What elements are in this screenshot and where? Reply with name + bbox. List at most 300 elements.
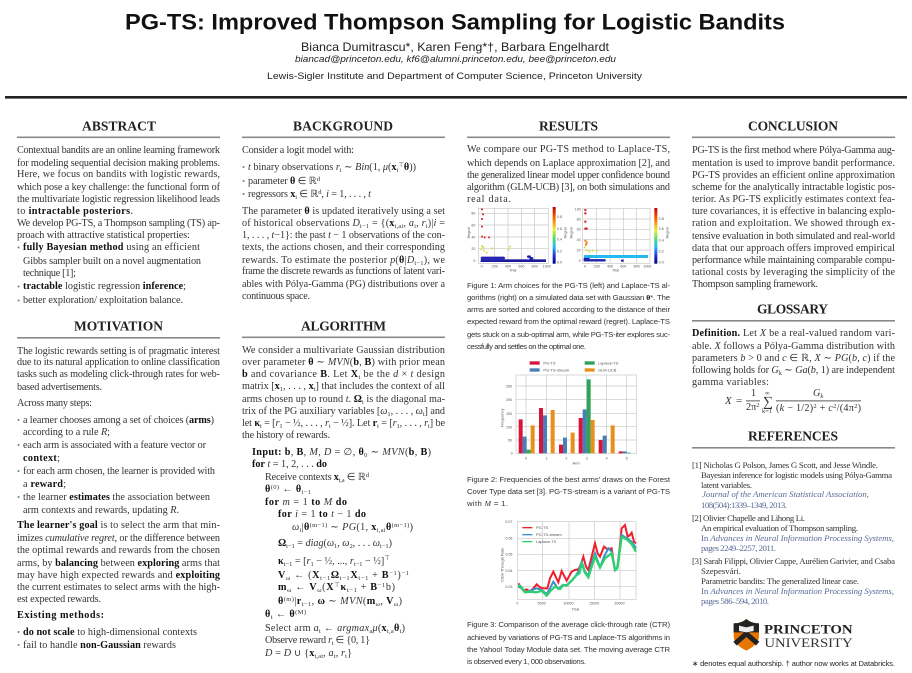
axis labels (500, 385, 628, 466)
algorithm pseudocode: t−1 (358, 575, 368, 582)
algorithm pseudocode: X (350, 570, 358, 581)
conclusion text (692, 145, 896, 290)
background text: ∈ ℝ (297, 189, 318, 200)
scatter plot: Laplace-TS: 0.0 (659, 261, 664, 265)
algorithm pseudocode: ω (394, 601, 399, 608)
motivation text: context; (23, 453, 60, 464)
algorithm pseudocode: d (366, 472, 370, 479)
algorithm pseudocode: for t = 1, 2, . . . do (252, 459, 327, 470)
background text: rewards. To estimate the posterior p(θ|D (242, 255, 414, 266)
glossary definition: able. X follows a Pólya-Gamma distribution with (692, 341, 895, 352)
algorithm pseudocode: t (332, 640, 334, 647)
glossary definition: Definition. Let X be a real-valued random vari- (692, 328, 896, 339)
algorithm pseudocode: , (323, 648, 328, 659)
conclusion text: mentation is used to improve bandit performance. (692, 158, 895, 169)
algorithm pseudocode: ∼ (368, 447, 382, 458)
scatter plot: Laplace-TS: 0.6 (659, 227, 664, 231)
algorithm intro text: be the (361, 369, 393, 380)
results intro text: which depends on Laplace approximation [2], and (467, 158, 670, 169)
axis labels: 0.06 (505, 537, 512, 541)
scatter plot: PG-TS: 20 (471, 247, 475, 251)
algorithm pseudocode: t (271, 614, 273, 621)
algorithm pseudocode: t−1 (380, 543, 389, 550)
background text: t−1 (360, 223, 369, 230)
algorithm pseudocode: r (307, 556, 311, 567)
figure 2 caption (466, 475, 671, 508)
scatter plot: Laplace-TS: 40 (577, 238, 581, 242)
algorithm pseudocode: b) (386, 582, 395, 593)
panel: glossary (692, 302, 896, 415)
scatter plot: PG-TS: 1000 (543, 265, 551, 269)
scatter plot: PG-TS: Regret (564, 227, 568, 238)
algorithm intro text: 1 (397, 423, 400, 430)
background text: frame the discrete rewards as functions of latent vari- (242, 266, 446, 277)
algorithm intro text: ω (416, 406, 423, 417)
algorithm pseudocode: PG(1, x (342, 522, 376, 533)
scatter plot: PG-TS: 60 (471, 223, 475, 227)
figure 2: bar chart of arm frequencies (500, 361, 637, 466)
algorithm pseudocode: ∈ {0, 1} (333, 635, 370, 646)
abstract text: better exploration/ exploitation balance. (23, 295, 183, 306)
algorithm pseudocode: (m−1) (310, 522, 327, 529)
algorithm intro text: t (314, 386, 316, 393)
motivation text: a learner chooses among a set of choices (arms) (23, 415, 214, 426)
chart legend: PG-TS-stream (536, 532, 562, 537)
glossary definition: parameters b > 0 and c ∈ ℝ, X ∼ PG(b, c) if the (692, 353, 895, 364)
glossary definition: following holds for G (692, 365, 779, 376)
conclusion text: terior. As PG-TS explicitly estimates context fea- (692, 194, 896, 205)
algorithm intro text: the history of rewards. (242, 430, 330, 441)
background text: , (321, 189, 326, 200)
scatter plot: PG-TS: 800 (532, 265, 538, 269)
figure 1 caption: arms are sorted and colored according to the distance of their (467, 305, 670, 314)
background text: a (409, 218, 414, 229)
algorithm pseudocode: ) (389, 538, 392, 549)
algorithm intro text: arms chosen up to round t. Ω (242, 394, 362, 405)
algorithm pseudocode: , . . . (353, 538, 373, 549)
panel: algorithm (242, 318, 446, 660)
motivation text: the learner estimates the association between (23, 492, 210, 503)
background text: i,ai (395, 223, 403, 230)
background text: d (318, 189, 322, 196)
algorithm pseudocode: } (347, 648, 352, 659)
algorithm pseudocode: − ½] (363, 556, 384, 567)
motivation text: The logistic rewards setting is of pragmatic interest (17, 346, 220, 357)
algorithm pseudocode: Input: b, B, M, D = ∅, θ (252, 447, 364, 458)
algorithm intro text: 1 (280, 386, 283, 393)
axis labels: 0.04 (505, 569, 512, 573)
algorithm pseudocode: i (300, 527, 302, 534)
algorithm intro text: over parameter θ ∼ MVN(b, B) with prior mean (242, 357, 445, 368)
motivation text: The learner's goal is to select the arm that min- (17, 520, 221, 531)
scatter plot: PG-TS: 0 (473, 259, 475, 263)
axis labels: 0 (516, 601, 518, 605)
axis labels: 150 (506, 412, 512, 416)
algorithm pseudocode: θ (394, 623, 399, 634)
algorithm pseudocode: (m) (284, 596, 294, 603)
background text: = {( (369, 218, 390, 229)
axis labels: 4 (606, 456, 608, 460)
scatter plot: Laplace-TS: 600 (620, 265, 626, 269)
algorithm pseudocode: ⊤ (334, 582, 340, 589)
background text (242, 145, 446, 302)
axis labels: 2 (565, 456, 567, 460)
axis labels: 200 (506, 398, 512, 402)
algorithm pseudocode: a (329, 648, 334, 659)
figure 2 caption: Cover Type data set [3]. PG-TS-stream is a variant of PG-TS (467, 487, 670, 496)
background text: i (396, 167, 398, 174)
heading: conclusion: CONCLUSION (748, 118, 838, 134)
reference list: [2] Olivier Chapelle and Lihong Li. (692, 513, 805, 523)
algorithm pseudocode: m (278, 582, 287, 593)
algorithm pseudocode: ω (373, 538, 380, 549)
reference list: [3] Sarah Filippi, Olivier Cappe, Aurélien Garivier, and Csaba (692, 556, 895, 566)
algorithm pseudocode: θ (265, 609, 270, 620)
chart legend (522, 525, 562, 544)
chart legend: Laplace-TS (598, 361, 619, 366)
background text: r (422, 218, 426, 229)
scatter plot: PG-TS: 0.8 (557, 215, 562, 219)
scatter plot: Laplace-TS: 800 (634, 265, 640, 269)
algorithm pseudocode: t (345, 653, 347, 660)
background text: The parameter θ is updated iteratively using a set (242, 206, 445, 217)
algorithm pseudocode: θ (278, 596, 283, 607)
results intro text: algorithm (GLM-UCB) [3], on both simulations and (467, 182, 670, 193)
glossary definition: k (779, 370, 783, 377)
glossary formula: c (828, 403, 833, 414)
axis labels: 0.03 (505, 585, 512, 589)
motivation text: according to a rule R; (23, 427, 110, 438)
axis labels (500, 520, 625, 611)
algorithm pseudocode: X (312, 570, 320, 581)
algorithm pseudocode: θ (386, 522, 391, 533)
algorithm pseudocode: ← (279, 484, 295, 495)
algorithm pseudocode: diag(ω (306, 538, 334, 549)
algorithm pseudocode: , (380, 596, 386, 607)
scatter plot: PG-TS: Regret (467, 227, 471, 238)
algorithm intro text: ] that includes the context of all (316, 381, 445, 392)
chart legend: PG-TS (536, 525, 549, 530)
scatter plot: Laplace-TS (570, 207, 669, 273)
algorithm intro text: 1 (387, 411, 391, 418)
abstract text: Here, we focus on bandits with logistic rewards, (17, 169, 220, 180)
figure 1 caption (467, 281, 670, 351)
algorithm pseudocode: ← (321, 623, 337, 634)
abstract text: the multivariate logistic regression likelihood leads (17, 194, 220, 205)
glossary formula: 2π (746, 402, 756, 413)
glossary formula: 2 (854, 403, 857, 410)
footnote: ∗ denotes equal authorship. † author now works at Databricks. (692, 659, 895, 668)
background text: of historical observations D (242, 218, 360, 229)
panel: background (242, 118, 446, 302)
algorithm intro text: is the diagonal ma- (364, 394, 446, 405)
background text: continuous space. (242, 291, 310, 302)
motivation text: fail to handle non-Gaussian rewards (23, 640, 176, 651)
heading: glossary: GLOSSARY (757, 302, 828, 316)
algorithm pseudocode: V (386, 596, 394, 607)
background text: ∼ (342, 162, 355, 173)
scatter plot: PG-TS: 40 (471, 235, 475, 239)
scatter plot: Laplace-TS: 400 (607, 265, 613, 269)
glossary definition: gamma variables: (692, 377, 769, 388)
algorithm pseudocode: (x (378, 623, 387, 634)
axis labels: 3 (586, 456, 588, 460)
glossary formula: ) (858, 403, 861, 414)
motivation text: imizes cumulative regret, or the difference between (17, 533, 220, 544)
reference list: Bayesian inference for logistic models using Pólya-Gamma (701, 470, 892, 480)
algorithm pseudocode: t−1 (284, 561, 292, 568)
wordmark: PRINCETON (764, 622, 853, 636)
algorithm pseudocode: a (369, 628, 372, 635)
conclusion text: data that our approach offers improved empirical (692, 243, 895, 254)
algorithm pseudocode: t−1 (320, 575, 330, 582)
figure 3 caption: is observed every 1, 000 observations. (467, 657, 586, 666)
algorithm pseudocode: t (400, 628, 402, 635)
results intro text: We compare our PG-TS method to Laplace-TS, (467, 144, 670, 155)
heading: motivation: MOTIVATION (74, 318, 163, 334)
algorithm pseudocode: r (341, 648, 345, 659)
algorithm pseudocode: θ (289, 609, 295, 620)
algorithm pseudocode: θ (296, 484, 301, 495)
algorithm pseudocode: ω (286, 575, 291, 582)
bars (519, 379, 631, 453)
panel: references (692, 428, 895, 606)
algorithm pseudocode: ω (287, 587, 292, 594)
algorithm pseudocode: ) (397, 570, 401, 581)
heading: background: BACKGROUND (293, 118, 393, 134)
abstract text: technique [1]; (23, 268, 76, 279)
algorithm pseudocode: ( (322, 582, 326, 593)
algorithm pseudocode: ) (410, 522, 413, 533)
line: PG-TS-stream (518, 535, 636, 594)
chart legend: PG-TS (543, 361, 556, 366)
glossary formula: 2 (813, 403, 817, 410)
axis labels: 20000 (614, 601, 625, 605)
algorithm pseudocode: V (278, 570, 286, 581)
figure 2 caption: Figure 2: Frequencies of the best arms' draws on the Forest (467, 475, 671, 484)
background text: i (295, 194, 297, 201)
algorithm intro text: We consider a multivariate Gaussian distribution (242, 345, 445, 356)
axis labels: 0 (525, 456, 527, 460)
motivation text: each arm is associated with a feature vector or (23, 440, 207, 451)
algorithm intro text: t (362, 399, 364, 406)
reference list: [1] Nicholas G Polson, James G Scott, and Jesse Windle. (692, 460, 878, 470)
algorithm pseudocode: t,at (314, 653, 323, 660)
axis labels: 0.07 (505, 520, 512, 524)
panel: motivation (17, 318, 221, 651)
algorithm pseudocode: for i = 1 to t − 1 do (278, 509, 366, 520)
figure 3: line chart of click-through rate (500, 520, 636, 611)
scatter plot: Laplace-TS: 0.8 (659, 217, 664, 221)
motivation text: arm contexts and rewards, updating R. (23, 505, 179, 516)
chart legend: GLM-UCB (598, 368, 617, 373)
motivation text: due to its natural application to online classification (17, 357, 220, 368)
scatter plot: Laplace-TS: 80 (577, 218, 581, 222)
axis labels: 0.05 (505, 553, 512, 557)
figure 1 caption: expected reward from the optimal reward (regret). Laplace-TS (467, 317, 670, 326)
abstract text: to intractable posteriors. (17, 206, 133, 217)
abstract text (17, 145, 221, 306)
motivation text: Existing methods: (17, 610, 104, 621)
scatter plot: Laplace-TS: 0 (579, 259, 581, 263)
figure 1 caption: gorithms (right) on a simulated data set with Gaussian θ*. The (467, 293, 670, 302)
algorithm pseudocode: − ½, ..., (314, 556, 350, 567)
algorithm pseudocode: t−1 (302, 601, 311, 608)
background text: , (403, 218, 409, 229)
algorithm pseudocode: ω ∼ MVN(m (317, 596, 375, 607)
reference list: pages 2249–2257, 2011. (701, 543, 776, 553)
background text: regressors x (248, 189, 295, 200)
axis labels: 5 (626, 456, 628, 460)
algorithm pseudocode: 2 (349, 543, 353, 550)
algorithm pseudocode: ∈ ℝ (344, 472, 366, 483)
axis labels: 5000 (538, 601, 546, 605)
algorithm intro text: d × t design (393, 369, 445, 380)
reference list: Parametric bandits: The generalized linear case. (701, 576, 859, 586)
chart legend (530, 361, 619, 373)
algorithm pseudocode: D = D ∪ {x (265, 648, 314, 659)
algorithm intro text: t (428, 423, 430, 430)
axis labels: 15000 (589, 601, 599, 605)
glossary definition: ∼ (782, 365, 795, 376)
axis labels: 250 (506, 385, 512, 389)
abstract text: tractable logistic regression inference; (23, 281, 186, 292)
Princeton University logo (734, 619, 853, 651)
axis labels: 50 (508, 439, 512, 443)
algorithm pseudocode: r (297, 596, 302, 607)
algorithm pseudocode: t (334, 653, 336, 660)
conclusion text: ration and exploitation. We showed through ex- (692, 218, 896, 229)
scatter plot: PG-TS: 0.4 (557, 238, 562, 242)
glossary formula: = (736, 395, 742, 407)
scatter plot: PG-TS: Trial (509, 269, 516, 273)
algorithm pseudocode: | (302, 522, 304, 533)
algorithm intro text: ] and (425, 406, 445, 417)
background text: ⊤ (398, 162, 404, 169)
conclusion text: PG-TS is the first method where Pólya-Gamma aug- (692, 145, 896, 156)
algorithm pseudocode (252, 447, 431, 660)
panel: results (466, 118, 671, 666)
algorithm intro text: t (260, 423, 262, 430)
glossary definition (692, 328, 896, 388)
motivation text (17, 346, 221, 651)
scatter plot: Laplace-TS: 20 (577, 248, 581, 252)
algorithm pseudocode: ← (292, 582, 309, 593)
axis labels: Trial (572, 606, 579, 611)
conclusion text: scheme for the analytically intractable logistic pos- (692, 182, 896, 193)
algorithm pseudocode: V (309, 582, 317, 593)
reference list: Szepesvári. (701, 566, 741, 576)
algorithm pseudocode: 1 (334, 543, 337, 550)
background text: Bin(1, μ(x (355, 162, 396, 173)
motivation text: arms, by balancing between exploring arms that (17, 558, 220, 569)
glossary formula: (k − 1/2) (776, 403, 813, 414)
algorithm pseudocode: Observe reward r (265, 635, 332, 646)
axis labels: 0 (511, 452, 513, 456)
algorithm pseudocode: MVN(b, B) (382, 447, 431, 458)
algorithm intro text: = [ (379, 418, 393, 429)
scatter plot: PG-TS: 200 (492, 265, 498, 269)
algorithm pseudocode: −1 (389, 570, 397, 577)
heading: algorithm: ALGORITHM (301, 318, 386, 334)
glossary formula: ∑ (763, 395, 773, 410)
glossary formula: k=1 (762, 408, 772, 415)
panel: abstract (17, 118, 221, 306)
algorithm pseudocode: + (357, 582, 370, 593)
panel: conclusion (692, 118, 896, 290)
figure 3 caption: Figure 3: Comparison of the average click-through rate (CTR) (467, 620, 670, 629)
heading: results: RESULTS (539, 118, 598, 134)
results intro text: the generalized linear model upper confidence bound (467, 170, 670, 181)
wordmark: UNIVERSITY (764, 636, 853, 650)
axis labels: Arm (572, 461, 580, 466)
algorithm pseudocode: Receive contexts x (265, 472, 339, 483)
algorithm intro text: , . . . , (400, 418, 424, 429)
algorithm pseudocode: | (294, 596, 296, 607)
algorithm pseudocode: argmax (337, 623, 370, 634)
algorithm pseudocode: , (337, 538, 342, 549)
algorithm intro text: t (358, 374, 360, 381)
abstract text: fully Bayesian method using an efficient (23, 242, 200, 253)
scatter plot: PG-TS: 0.2 (557, 249, 562, 253)
scatter plot: Laplace-TS: 1000 (643, 265, 651, 269)
scatter plot: PG-TS: 400 (505, 265, 511, 269)
algorithm pseudocode: (0) (271, 484, 279, 491)
figure 3 caption: achieved by variations of PG-TS and Laplace-TS algorithms in (467, 633, 670, 642)
background text: Consider a logit model with: (242, 145, 354, 156)
scatter plot: Laplace-TS: Regret (570, 227, 574, 238)
algorithm intro text: t (377, 423, 379, 430)
scatter plot: Laplace-TS: 0.2 (659, 250, 664, 254)
algorithm pseudocode: −1 (401, 570, 409, 577)
poster header (5, 10, 907, 99)
algorithm intro text: r (325, 418, 329, 429)
conclusion text: PG-TS provides an efficient online approximation (692, 170, 895, 181)
results intro text (467, 144, 670, 205)
scatter plot: PG-TS (467, 207, 568, 273)
algorithm intro text: ] be (430, 418, 445, 429)
scatter plot: PG-TS: 0.6 (557, 227, 562, 231)
algorithm pseudocode: t−1 (347, 587, 357, 594)
algorithm pseudocode: μ (372, 623, 378, 634)
algorithm pseudocode: ) (399, 596, 402, 607)
background text: 1, . . . , t−1}: the past t − 1 observations of the con- (242, 230, 446, 241)
background text: i = (434, 218, 445, 229)
algorithm pseudocode: X (326, 582, 334, 593)
algorithm pseudocode: θ (304, 522, 309, 533)
algorithm pseudocode: 0 (364, 452, 367, 459)
wordmark (764, 622, 853, 650)
reference list (692, 460, 895, 606)
algorithm pseudocode: ω (342, 538, 349, 549)
axis labels: Frequency (500, 408, 505, 427)
motivation text: tasks such as modeling click-through rates for web- (17, 369, 221, 380)
glossary formula: X (724, 395, 733, 407)
algorithm pseudocode: 1 (310, 561, 314, 568)
background text: i (340, 167, 342, 174)
conclusion text: ture covariances, it is effective in balancing explo- (692, 206, 896, 217)
line: Laplace-TS (518, 537, 636, 596)
algorithm pseudocode: = [ (292, 556, 307, 567)
abstract text: proach with attractive statistical properties: (17, 230, 190, 241)
conclusion text: Thompson sampling framework. (692, 279, 818, 290)
reference list: latent variables. (701, 480, 752, 490)
background text: i (426, 223, 428, 230)
algorithm pseudocode: B (370, 582, 377, 593)
algorithm pseudocode: κ (341, 582, 347, 593)
algorithm pseudocode: κ (278, 556, 284, 567)
abstract text: for modeling sequential decision making problems. (17, 158, 220, 169)
